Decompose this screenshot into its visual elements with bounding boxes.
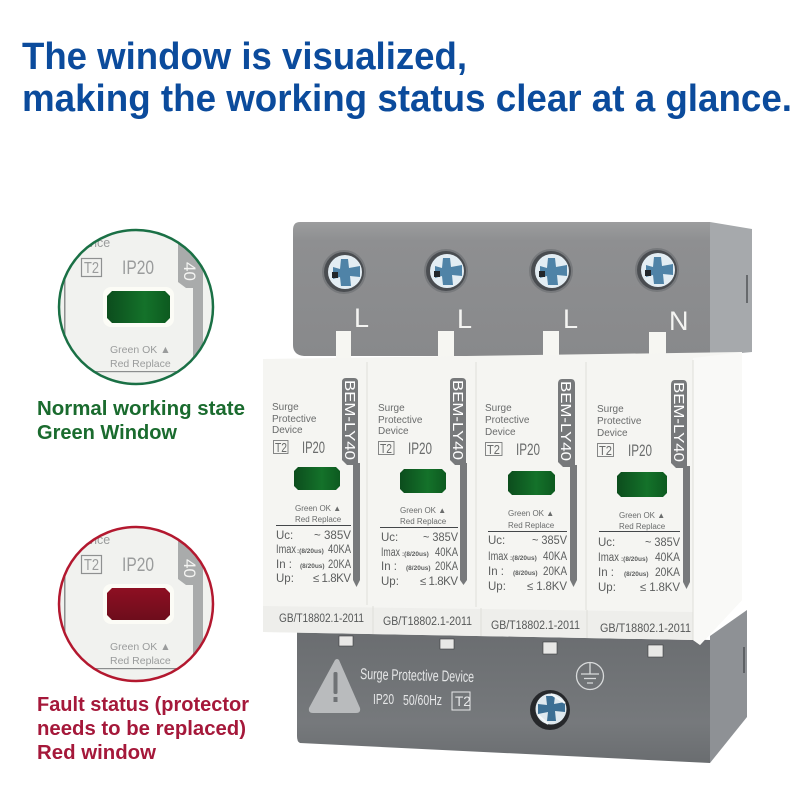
module 2: Surge — [378, 403, 405, 414]
module 4: ~ 385V — [645, 537, 680, 549]
module 3: Protective — [485, 415, 530, 426]
terminal screw 4 — [635, 248, 679, 292]
green window caption — [37, 398, 245, 444]
module 4: Uc: — [598, 537, 615, 549]
model strip: BEM-LY40 — [557, 381, 574, 461]
housing print: 50/60Hz — [403, 692, 442, 709]
module 2: Green OK ▲ — [400, 506, 446, 515]
module 4: T2 — [599, 443, 612, 458]
inset: green window — [55, 226, 217, 388]
module 2: 40KA — [435, 547, 458, 559]
housing print: T2 — [455, 694, 471, 709]
module 4: In : — [598, 567, 614, 579]
module 2: Imax — [381, 547, 400, 559]
module 2 — [378, 378, 472, 628]
device: white front body — [263, 352, 742, 657]
inset: green window: Green OK ▲ — [110, 344, 171, 356]
module 1: Protective — [272, 414, 317, 425]
inset: green window: vice — [88, 236, 110, 250]
terminal labels: L — [457, 304, 472, 334]
module 2: 20KA — [435, 561, 458, 573]
module 3: ≤ 1.8KV — [527, 581, 567, 593]
terminal tabs — [336, 331, 666, 362]
terminal labels: L — [354, 303, 369, 333]
module 4: (8/20us) — [624, 571, 649, 578]
module 2: ~ 385V — [423, 532, 458, 544]
red window caption: needs to be replaced) — [37, 718, 246, 740]
title — [22, 36, 792, 120]
housing print: IP20 — [373, 691, 394, 708]
module 4: 40KA — [655, 552, 680, 564]
module 1: (8/20us) — [300, 563, 325, 570]
module 3: (8/20us) — [513, 570, 538, 577]
title: making the working status clear at a glance. — [22, 78, 792, 120]
status window — [617, 472, 667, 497]
red window caption — [37, 694, 249, 764]
module 1: :(8/20us) — [297, 548, 324, 555]
warning triangle icon — [309, 659, 360, 713]
module 3: Imax — [488, 551, 508, 563]
model strip — [557, 379, 577, 587]
module 3: IP20 — [516, 441, 540, 459]
terminal screw 1 — [322, 250, 366, 294]
module 1 — [272, 378, 364, 625]
module 1: Imax — [276, 544, 296, 556]
inset: green window: T2 — [84, 260, 99, 277]
module 4: Surge — [597, 404, 624, 415]
module 2: Red Replace — [400, 517, 447, 526]
module 4: Up: — [598, 582, 616, 594]
module 2: :(8/20us) — [402, 551, 429, 558]
green window caption: Green Window — [37, 422, 177, 444]
module 1: 20KA — [328, 559, 351, 571]
module 2: T2 — [380, 441, 392, 456]
module 3: Red Replace — [508, 521, 555, 530]
module 4: GB/T18802.1-2011 — [600, 623, 691, 635]
module 3: Up: — [488, 581, 506, 593]
module 1: GB/T18802.1-2011 — [279, 613, 364, 625]
module 2: Up: — [381, 576, 399, 588]
module 1: 40KA — [328, 544, 351, 556]
inset: red window: vice — [88, 533, 110, 547]
model strip: BEM-LY40 — [670, 382, 687, 462]
module 3: ~ 385V — [532, 535, 567, 547]
terminal labels — [354, 303, 688, 336]
module 2: In : — [381, 561, 397, 573]
module 3: 40KA — [543, 551, 567, 563]
module 4 — [597, 380, 691, 635]
module 4: Imax — [598, 552, 619, 564]
red window caption: Fault status (protector — [37, 694, 249, 716]
module 2: Device — [378, 426, 409, 437]
model strip — [670, 380, 690, 589]
model strip — [449, 378, 467, 585]
inset: red window: 40 — [180, 559, 199, 578]
status window — [294, 467, 340, 490]
module 1: Device — [272, 425, 303, 436]
module 1: Up: — [276, 573, 294, 585]
module 2: IP20 — [408, 440, 432, 458]
green window caption: Normal working state — [37, 398, 245, 420]
module 3: Device — [485, 427, 516, 438]
module 1: Red Replace — [295, 515, 342, 524]
module 4: 20KA — [655, 567, 680, 579]
terminal screw 3 — [529, 249, 573, 293]
module 1: In : — [276, 559, 292, 571]
module 3: T2 — [487, 442, 500, 457]
module 1: T2 — [275, 440, 287, 455]
module 3: In : — [488, 566, 504, 578]
device: bottom housing — [297, 610, 747, 763]
module 4: ≤ 1.8KV — [640, 582, 680, 594]
module 3 — [485, 379, 580, 632]
ground screw — [530, 690, 570, 730]
module 2: (8/20us) — [406, 565, 431, 572]
terminal labels: L — [563, 304, 578, 334]
terminal screw 2 — [424, 249, 468, 293]
device: top housing — [293, 222, 752, 362]
module 4: Red Replace — [619, 522, 666, 531]
inset: green window: Red Replace — [110, 358, 171, 370]
bottom tabs — [339, 636, 663, 657]
inset: green window: IP20 — [122, 258, 154, 279]
module 2: GB/T18802.1-2011 — [383, 616, 472, 628]
module 4: :(8/20us) — [621, 556, 648, 563]
module 1: ~ 385V — [314, 530, 351, 542]
module 4: Protective — [597, 416, 642, 427]
module 1: Green OK ▲ — [295, 504, 341, 513]
module 4: Device — [597, 428, 628, 439]
module 4: IP20 — [628, 442, 652, 460]
module 3: Uc: — [488, 535, 505, 547]
module 4: Green OK ▲ — [619, 511, 665, 520]
module 1: ≤ 1.8KV — [313, 573, 351, 585]
module 3: Green OK ▲ — [508, 509, 554, 518]
housing print: Surge Protective Device — [360, 666, 474, 686]
module 3: 20KA — [543, 566, 567, 578]
module 1: Surge — [272, 402, 299, 413]
status window — [508, 471, 555, 495]
model strip: BEM-LY40 — [341, 380, 358, 460]
red window caption: Red window — [37, 742, 156, 764]
model strip: BEM-LY40 — [449, 380, 466, 460]
inset: red window: Red Replace — [110, 655, 171, 667]
module 3: Surge — [485, 403, 512, 414]
model strip — [341, 378, 360, 587]
status window — [400, 469, 446, 493]
inset: green window: 40 — [180, 262, 199, 281]
module 3: GB/T18802.1-2011 — [491, 620, 580, 632]
module 2: Protective — [378, 415, 423, 426]
inset: red window: T2 — [84, 557, 99, 574]
module 1: IP20 — [302, 439, 325, 457]
inset: red window: Green OK ▲ — [110, 641, 171, 653]
inset: red window: IP20 — [122, 555, 154, 576]
ground symbol icon — [576, 662, 604, 690]
module 1: Uc: — [276, 530, 293, 542]
module 2: Uc: — [381, 532, 398, 544]
terminal labels: N — [669, 306, 688, 336]
housing print — [360, 666, 474, 710]
inset: red window — [55, 523, 217, 685]
title: The window is visualized, — [22, 36, 467, 78]
module 3: :(8/20us) — [510, 555, 537, 562]
module 2: ≤ 1.8KV — [420, 576, 458, 588]
